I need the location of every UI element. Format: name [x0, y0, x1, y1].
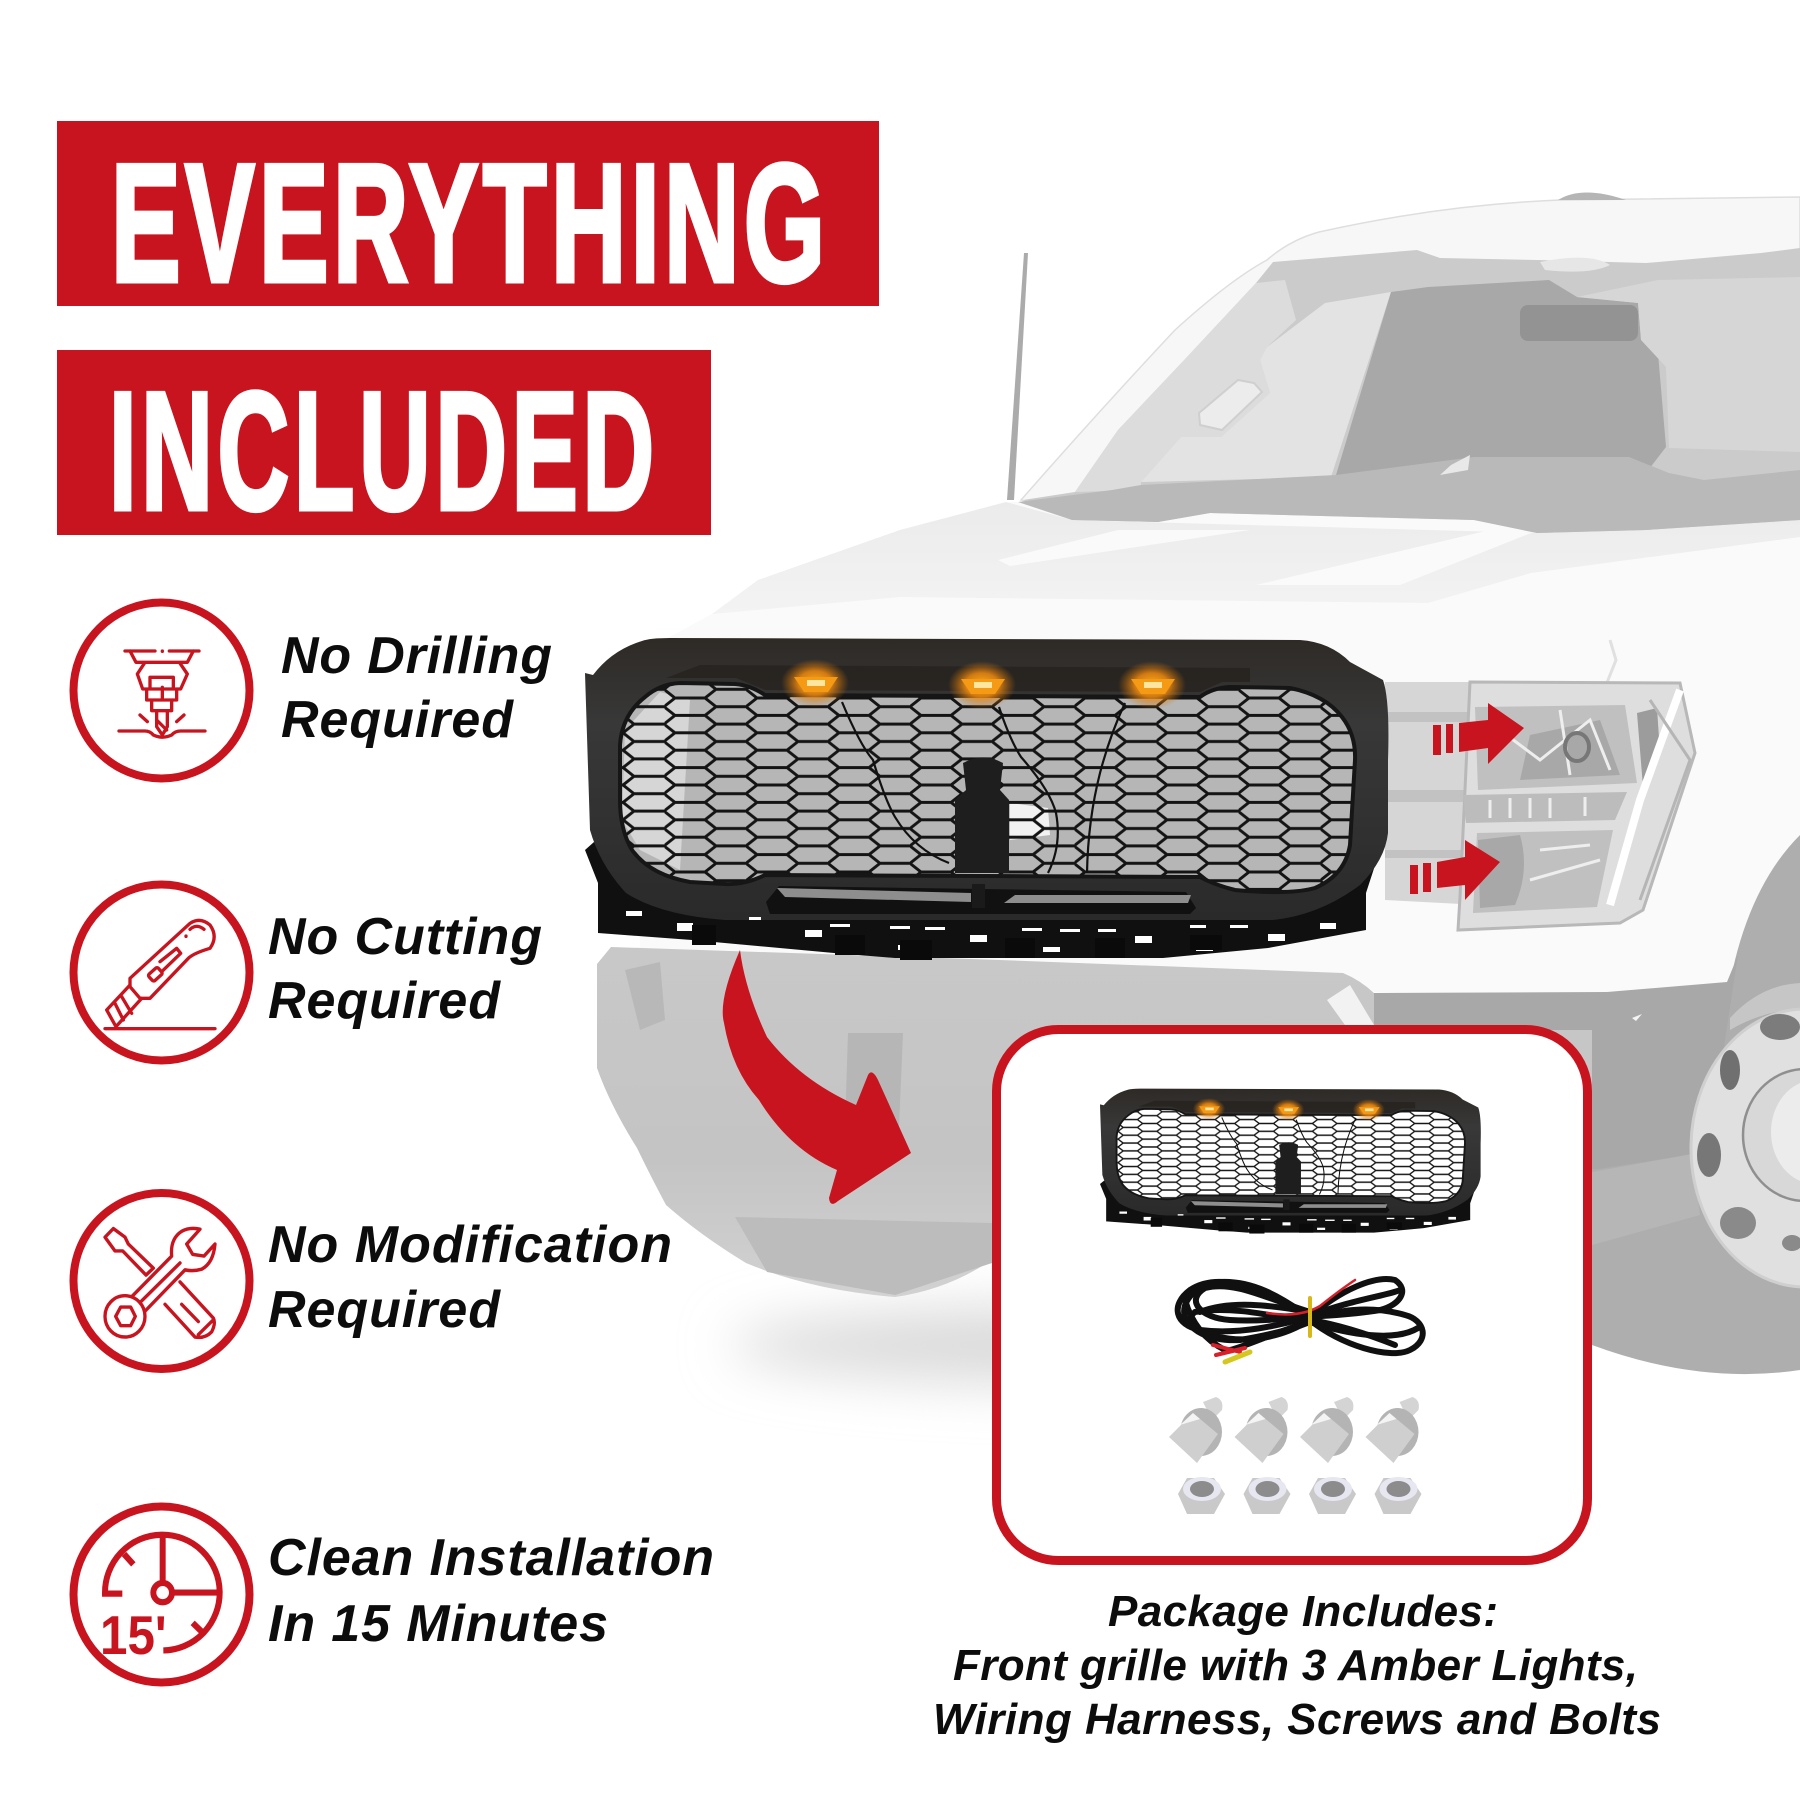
heading: included: INCLUDED	[109, 358, 659, 546]
heading: everything: EVERYTHING	[111, 128, 829, 317]
ground shadow	[730, 1305, 1530, 1385]
text: no drilling: Required	[281, 691, 514, 749]
wheel rim	[1691, 983, 1800, 1287]
icon: 15 minute clock: 15'	[100, 1605, 167, 1666]
grille small	[1100, 1089, 1481, 1234]
roof sensor	[1558, 192, 1626, 200]
bolts	[1169, 1397, 1419, 1463]
nuts	[1178, 1477, 1422, 1514]
text: no cutting: No Cutting	[268, 908, 542, 966]
bumper details	[625, 962, 1374, 1295]
text: no drilling: No Drilling	[281, 627, 552, 685]
hood	[712, 502, 1800, 614]
text: no modification: No Modification	[268, 1216, 672, 1274]
roof	[1021, 197, 1800, 520]
text: clean installation	[268, 1529, 714, 1653]
panel: package contents	[996, 1030, 1588, 1560]
antenna	[1007, 253, 1028, 500]
icon: utility knife	[74, 884, 250, 1060]
side grille area	[1385, 682, 1480, 905]
text: no cutting	[268, 908, 542, 1030]
icon: 15 minute clock	[74, 1506, 250, 1682]
hood highlights	[998, 530, 1531, 585]
caption: package includes	[933, 1587, 1661, 1744]
side panel	[1374, 955, 1738, 1245]
caption: package includes: Front grille with 3 Amber Lights,	[953, 1641, 1638, 1690]
arrow: upper headlight	[1433, 703, 1524, 764]
text: clean installation: Clean Installation	[268, 1529, 714, 1587]
icon: drill	[74, 602, 250, 778]
headlight	[1458, 682, 1695, 930]
wheel arch and tire	[1592, 835, 1800, 1374]
caption: package includes: Wiring Harness, Screws and Bolts	[933, 1695, 1661, 1744]
wiring harness	[1178, 1279, 1423, 1362]
truck body	[640, 500, 1800, 997]
caption: package includes: Package Includes:	[1108, 1587, 1498, 1636]
front bumper	[597, 947, 1700, 1300]
text: no modification: Required	[268, 1281, 501, 1339]
text: clean installation: In 15 Minutes	[268, 1595, 608, 1653]
text: no modification	[268, 1216, 672, 1339]
curved arrow to package	[723, 950, 911, 1204]
windshield	[1018, 248, 1800, 533]
grille large on truck	[585, 638, 1388, 960]
arrow: lower headlight	[1410, 840, 1500, 900]
truck illustration (faded)	[597, 192, 1800, 1385]
fender crease lines	[1604, 640, 1616, 690]
text: no cutting: Required	[268, 972, 501, 1030]
text: no drilling	[281, 627, 552, 749]
icon: wrench and screwdriver	[74, 1193, 250, 1369]
